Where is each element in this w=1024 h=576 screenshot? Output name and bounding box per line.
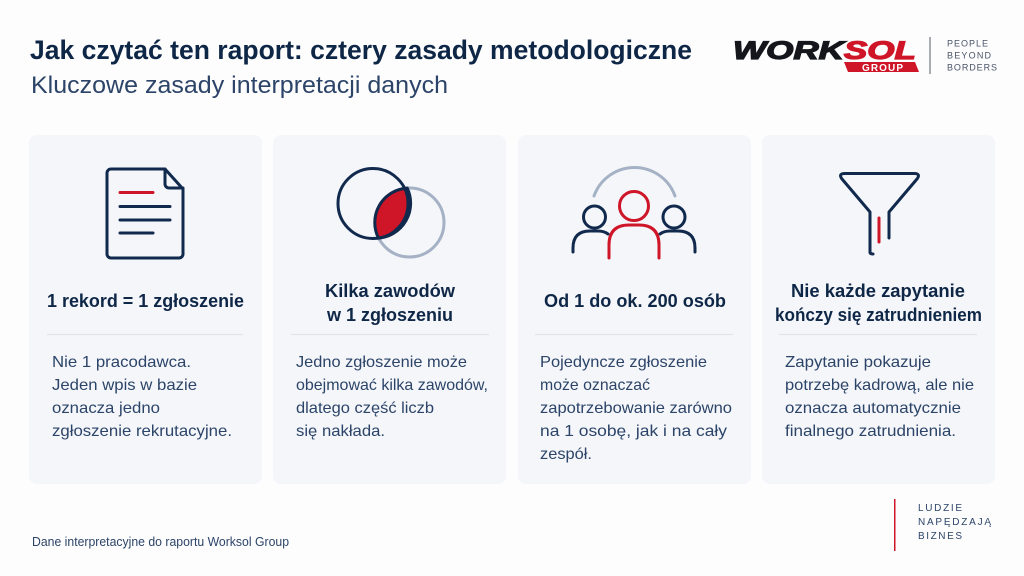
heading [775,281,982,325]
body text: oznacza automatycznie [785,400,961,417]
logo: Worksol Group [733,37,997,74]
motto: ludzie napędzają biznes: BIZNES [918,531,962,542]
body text: Jedno zgłoszenie może [296,354,467,371]
body text: Jeden wpis w bazie [52,377,197,394]
body text [540,354,732,463]
body text: się nakłada. [296,423,385,440]
logo tagline: PEOPLE [947,38,988,48]
icon: overlapping circles [338,168,444,257]
heading: Kilka zawodów [325,281,456,301]
heading: Nie każde zapytanie [791,281,965,301]
body text: dlatego część liczb [296,400,434,417]
footer note: Dane interpretacyjne do raportu Worksol Group [32,535,289,549]
motto: ludzie napędzają biznes [894,499,991,551]
heading: 1 rekord = 1 zgłoszenie [47,291,244,311]
body text: potrzebę kadrową, ale nie [785,377,974,394]
logo tagline: BORDERS [947,62,997,72]
motto: ludzie napędzają biznes: LUDZIE [918,503,962,514]
panel: 1 rekord [29,135,262,484]
body text: obejmować kilka zawodów, [296,377,488,394]
subtitle: Kluczowe zasady interpretacji danych [31,72,448,99]
body text: zespół. [540,446,592,463]
logo group badge [844,62,919,74]
icon: document [107,169,183,258]
logo tagline [947,38,997,72]
body text [52,354,232,440]
motto: ludzie napędzają biznes: NAPĘDZAJĄ [918,517,991,528]
icon: people group [573,167,695,258]
body text: zapotrzebowanie zarówno [540,400,732,417]
heading: w 1 zgłoszeniu [326,305,453,325]
body text [296,354,488,440]
body text: zgłoszenie rekrutacyjne. [52,423,232,440]
panel: od 1 do 200 osób [518,135,751,484]
icon: funnel [841,174,918,254]
logo tagline: BEYOND [947,50,992,60]
heading: Od 1 do ok. 200 osób [544,291,726,311]
body text: finalnego zatrudnienia. [785,423,956,440]
body text: Pojedyncze zgłoszenie [540,354,707,371]
body text [785,354,974,440]
body text: może oznaczać [540,377,650,394]
body text: Zapytanie pokazuje [785,354,931,371]
body text: na 1 osobę, jak i na cały [540,423,727,440]
panel: nie każde zapytanie [762,135,995,484]
logo wordmark: WORK SOL [733,37,916,65]
title: Jak czytać ten raport: cztery zasady metodologiczne [30,35,692,65]
body text: oznacza jedno [52,400,160,417]
logo group badge: GROUP [862,63,903,74]
heading [325,281,456,325]
panel: kilka zawodów [273,135,506,484]
heading: kończy się zatrudnieniem [775,305,982,325]
body text: Nie 1 pracodawca. [52,354,191,371]
